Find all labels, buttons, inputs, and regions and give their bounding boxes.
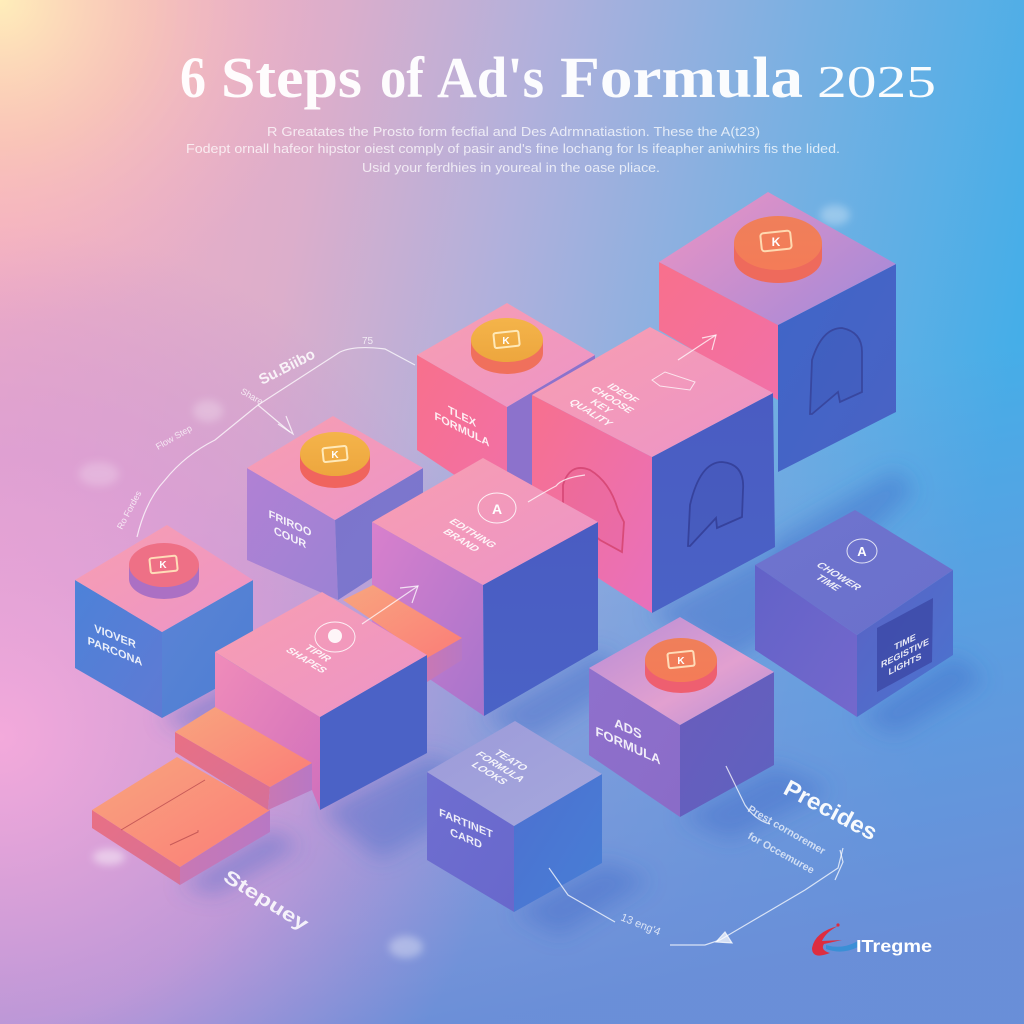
label: cube text: TLEX bbox=[448, 404, 476, 430]
cube: bottom left bbox=[75, 525, 253, 718]
cube: left middle bbox=[247, 416, 423, 600]
label: precides: Precides bbox=[780, 774, 882, 845]
floor shadows bbox=[160, 470, 985, 935]
icon: embossed arch bbox=[810, 328, 862, 414]
icon: circle mark bbox=[315, 622, 355, 652]
label: cube text: FRIROO bbox=[269, 509, 311, 539]
annotation: path labels: 75 bbox=[362, 336, 374, 347]
label: top face text: LOOKS bbox=[468, 761, 510, 786]
cube: front left with steps bbox=[215, 592, 427, 810]
icon: circle mark: A bbox=[857, 544, 867, 559]
panel: dark sign bbox=[877, 598, 933, 692]
icon: outline mark bbox=[652, 372, 695, 390]
annotation: precides notes: for Occemuree bbox=[746, 830, 816, 877]
arrow: bottom path right side bbox=[549, 766, 843, 945]
label: top face text: TIPIR bbox=[301, 643, 335, 664]
button: top right bbox=[734, 216, 822, 283]
arrow: bottom left cube to left middle cube bbox=[137, 348, 415, 537]
label: top face text: QUALITY bbox=[566, 398, 615, 428]
button: upper middle bbox=[471, 318, 543, 374]
annotation: path labels: Flow Step bbox=[154, 423, 194, 452]
arrow: step to centre cube bbox=[362, 586, 418, 624]
label: top face text: TIME bbox=[812, 573, 844, 593]
label: top face text bbox=[462, 744, 539, 790]
icon: embossed arch right face bbox=[688, 462, 743, 546]
logo: ITregme bbox=[856, 936, 932, 956]
button: left middle bbox=[300, 432, 370, 488]
subtitle text bbox=[186, 125, 840, 175]
step: lower landing bbox=[92, 757, 270, 885]
label: top face text bbox=[282, 639, 341, 675]
label: cube text: VIOVER bbox=[94, 623, 136, 651]
cube: centre bbox=[372, 458, 598, 716]
icon: circle mark bbox=[478, 493, 516, 523]
label: cube text: FORMULA bbox=[596, 724, 661, 768]
label: cube text: ADS bbox=[614, 715, 642, 742]
annotation: path labels: Su.Biibo bbox=[256, 346, 318, 389]
button: top right: K bbox=[772, 235, 781, 249]
annotation: path labels: Share bbox=[239, 386, 265, 407]
annotation: path labels: Ro Fordes bbox=[115, 489, 144, 531]
label: top face text: FORMULA bbox=[472, 750, 528, 784]
logo bbox=[812, 923, 932, 956]
label: top face text: SHAPES bbox=[282, 646, 330, 675]
label: top face text: EDITHING bbox=[446, 517, 499, 550]
label: steps: Stepuey bbox=[219, 866, 312, 935]
title: 2025 bbox=[817, 56, 936, 107]
panel: dark sign: TIME bbox=[894, 632, 916, 653]
button: ads formula bbox=[645, 638, 717, 693]
subtitle text: R Greatates the Prosto form fecfial and Des Adrmnatiastion. These the A(t23) bbox=[267, 125, 760, 139]
icon: circle mark bbox=[847, 539, 877, 563]
bubbles bbox=[79, 205, 850, 958]
cube: ads formula bbox=[589, 617, 774, 817]
button: bottom left: K bbox=[159, 560, 167, 571]
label: left face text: FARTINET bbox=[439, 807, 493, 841]
button: bottom left bbox=[129, 543, 199, 599]
label: top face text: CHOOSE bbox=[587, 385, 637, 415]
label: top face text bbox=[566, 378, 647, 428]
cube: upper middle bbox=[417, 303, 595, 510]
cube: top right bbox=[659, 192, 896, 472]
button: upper middle: K bbox=[502, 336, 510, 347]
title: 6 bbox=[180, 45, 206, 110]
label: top face text bbox=[802, 561, 865, 599]
icon: circle mark: A bbox=[492, 501, 502, 517]
title: of bbox=[380, 45, 425, 110]
cube: centre large bbox=[532, 327, 775, 613]
label: top face text: KEY bbox=[587, 398, 616, 415]
label: cube text: FORMULA bbox=[435, 410, 490, 450]
subtitle text: Usid your ferdhies in youreal in the oase pliace. bbox=[362, 161, 660, 175]
label: top face text: TEATO bbox=[491, 748, 531, 773]
arrow: centre cube to large cube bbox=[528, 475, 585, 502]
annotation: path labels bbox=[115, 336, 374, 531]
label: cube text: COUR bbox=[274, 525, 307, 551]
label: top face text: BRAND bbox=[440, 527, 483, 554]
icon: embossed arch left face bbox=[563, 468, 624, 552]
cube: right bbox=[755, 510, 953, 717]
button: left middle: K bbox=[331, 450, 339, 461]
annotation: bottom path label: 13 eng'4 bbox=[619, 912, 662, 938]
title: Formula bbox=[560, 45, 803, 110]
panel: dark sign: LIGHTS bbox=[889, 651, 921, 678]
annotation: precides notes: Prest cornoremer bbox=[746, 803, 827, 857]
label: left face text: CARD bbox=[450, 827, 482, 852]
title bbox=[180, 45, 936, 110]
label: top face text bbox=[434, 517, 499, 557]
label: top face text: CHOWER bbox=[813, 561, 865, 592]
label: cube text: PARCONA bbox=[88, 635, 142, 669]
panel: dark sign: REGISTIVE bbox=[881, 636, 929, 671]
label: top face text: IDEOF bbox=[604, 382, 642, 405]
step: back orange step bbox=[343, 585, 462, 682]
arrow: large cube to top cube bbox=[678, 335, 716, 360]
subtitle text: Fodept ornall hafeor hipstor oiest comply of pasir and's fine lochang for Is ifeapher aniwhirs fis the lided. bbox=[186, 142, 840, 156]
title: Steps bbox=[221, 45, 362, 110]
button: ads formula: K bbox=[677, 656, 685, 667]
title: Ad's bbox=[437, 45, 544, 110]
step: middle bbox=[175, 707, 312, 810]
cube: bottom bbox=[427, 721, 602, 912]
